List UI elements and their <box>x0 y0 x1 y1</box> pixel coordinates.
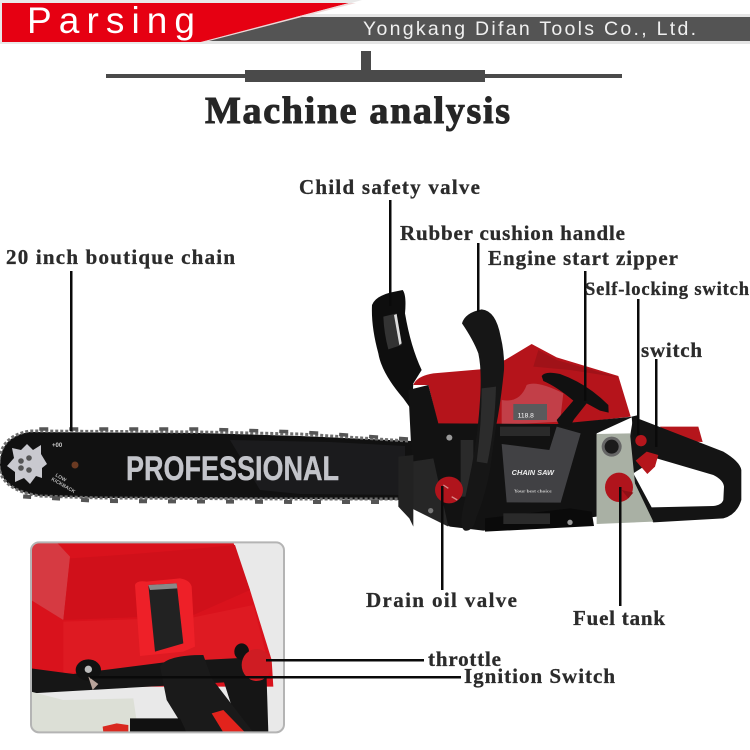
front handle <box>461 309 504 531</box>
label: switch: switch <box>641 338 702 362</box>
leader: drain oil valve <box>441 486 444 590</box>
leader: switch <box>655 359 658 447</box>
leader: self-locking switch <box>637 299 640 435</box>
label: ignition switch: Ignition Switch <box>464 664 615 688</box>
inset throttle knob <box>234 643 272 681</box>
chain teeth <box>30 429 408 439</box>
sprocket icon <box>7 444 47 484</box>
label: 20 inch boutique chain: 20 inch boutique chain <box>6 245 235 269</box>
chain saw panel: CHAIN SAW <box>512 468 555 477</box>
red housing <box>413 344 631 425</box>
label: drain oil valve: Drain oil valve <box>366 588 517 612</box>
leader: ignition switch <box>90 676 461 678</box>
chain saw panel: Your best choice <box>514 489 552 494</box>
chainsaw bar: +00 <box>52 443 63 449</box>
leader: rubber handle <box>477 243 480 312</box>
drain oil cap <box>435 477 463 503</box>
chainsaw bar: KICKBACK <box>50 477 76 495</box>
banner title: Parsing <box>27 0 195 41</box>
display label <box>513 404 547 420</box>
header banner <box>0 0 750 44</box>
fuel cap <box>605 473 633 502</box>
label: engine start zipper: Engine start zipper <box>488 246 678 270</box>
chain guard <box>372 290 422 410</box>
inset ignition post <box>76 659 101 690</box>
rear handle <box>630 417 741 522</box>
pull start handle <box>542 373 609 427</box>
leader: fuel tank <box>619 487 622 606</box>
chain saw panel <box>502 427 581 503</box>
label: rubber cushion handle: Rubber cushion handle <box>400 221 625 245</box>
chainsaw bar: LOW <box>54 473 67 484</box>
chain links <box>0 431 408 499</box>
inset handle <box>103 655 253 732</box>
label: fuel tank: Fuel tank <box>573 606 665 630</box>
label: self-locking switch: Self-locking switch <box>585 280 750 300</box>
display label: 118.8 <box>518 412 534 419</box>
black engine body <box>408 385 633 532</box>
title: Machine analysis <box>205 90 510 132</box>
leader: child safety valve <box>389 200 392 306</box>
leader: throttle <box>266 659 424 662</box>
chainsaw body <box>372 290 741 532</box>
inset frame <box>31 542 284 732</box>
inset photo <box>31 542 284 732</box>
company name: Yongkang Difan Tools Co., Ltd. <box>363 18 696 40</box>
leader: 20 inch chain <box>70 271 72 431</box>
label: child safety valve: Child safety valve <box>299 175 480 199</box>
bar lettering: PROFESSIONAL <box>126 450 339 488</box>
inset rocker switch <box>135 578 195 656</box>
heading ornament <box>106 51 622 82</box>
fuel tank panel <box>597 433 653 524</box>
bar mount teeth <box>398 455 413 527</box>
leader: engine zipper <box>584 271 586 401</box>
label: throttle: throttle <box>428 647 501 671</box>
switch lever <box>632 415 658 474</box>
chainsaw bar <box>0 429 412 502</box>
